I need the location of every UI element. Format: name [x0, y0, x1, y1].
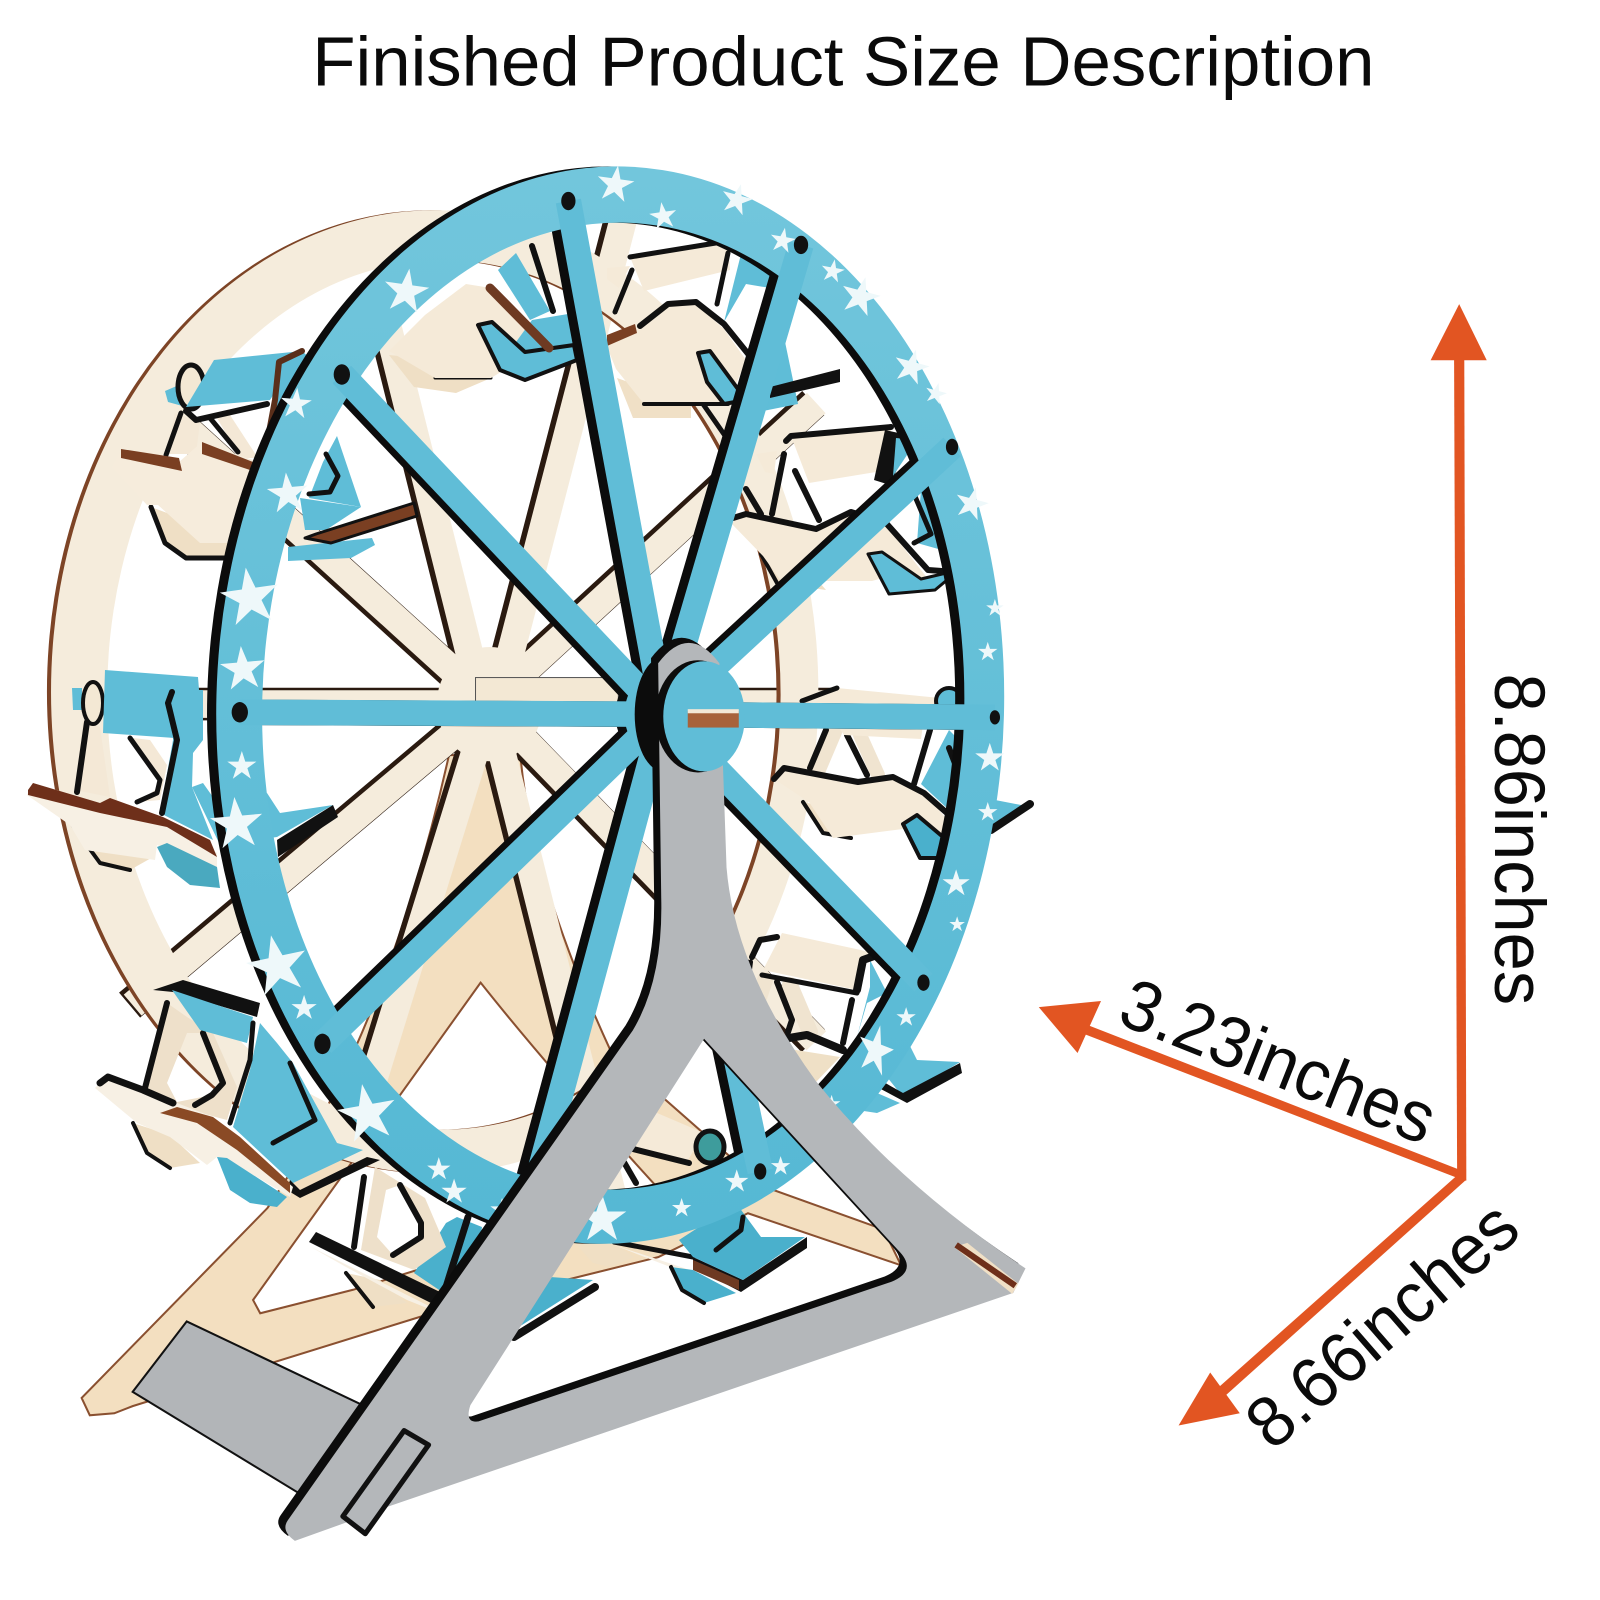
gondola: upper left [112, 351, 417, 561]
grey front stand [285, 643, 1026, 1541]
hub blue disc [655, 660, 745, 772]
back wooden spokes [58, 184, 837, 1194]
stand side tab [954, 1243, 1018, 1294]
title: Finished Product Size Description [312, 23, 1374, 101]
ferris wheel product photo [27, 156, 1030, 1541]
front blue wheel [202, 156, 1018, 1254]
axle [688, 709, 739, 728]
gondola: top centre [389, 246, 577, 393]
label: height: 8.86inches [1479, 673, 1559, 1005]
gondola: left middle [27, 670, 338, 888]
rim peg holes [232, 192, 1000, 1219]
grey stand edge [278, 638, 1018, 1536]
gondola: top right [605, 241, 840, 440]
arrow: height [1431, 304, 1487, 1181]
label: width: 8.66inches [1230, 1185, 1534, 1464]
gondolas [27, 241, 1030, 1342]
front blue wheel edge [193, 156, 1009, 1254]
back wooden wheel [47, 210, 818, 1173]
gondola: lower right [732, 933, 962, 1113]
grey base plate [133, 1321, 378, 1497]
hub back disc [635, 657, 692, 771]
stars on rim [208, 163, 1004, 1240]
back wooden stand [82, 755, 901, 1415]
gondola: bottom right [575, 1110, 807, 1303]
gondola: bottom centre [309, 1167, 595, 1342]
arrow: depth [1039, 1001, 1461, 1179]
arrow: width [1179, 1173, 1466, 1426]
label: depth: 3.23inches [1109, 963, 1447, 1160]
gondola: upper right [731, 427, 959, 594]
gondola: right middle [774, 688, 1030, 858]
stand foot tab [343, 1431, 429, 1534]
gondola: lower left [95, 980, 380, 1207]
back spoke cross piece [476, 678, 618, 702]
